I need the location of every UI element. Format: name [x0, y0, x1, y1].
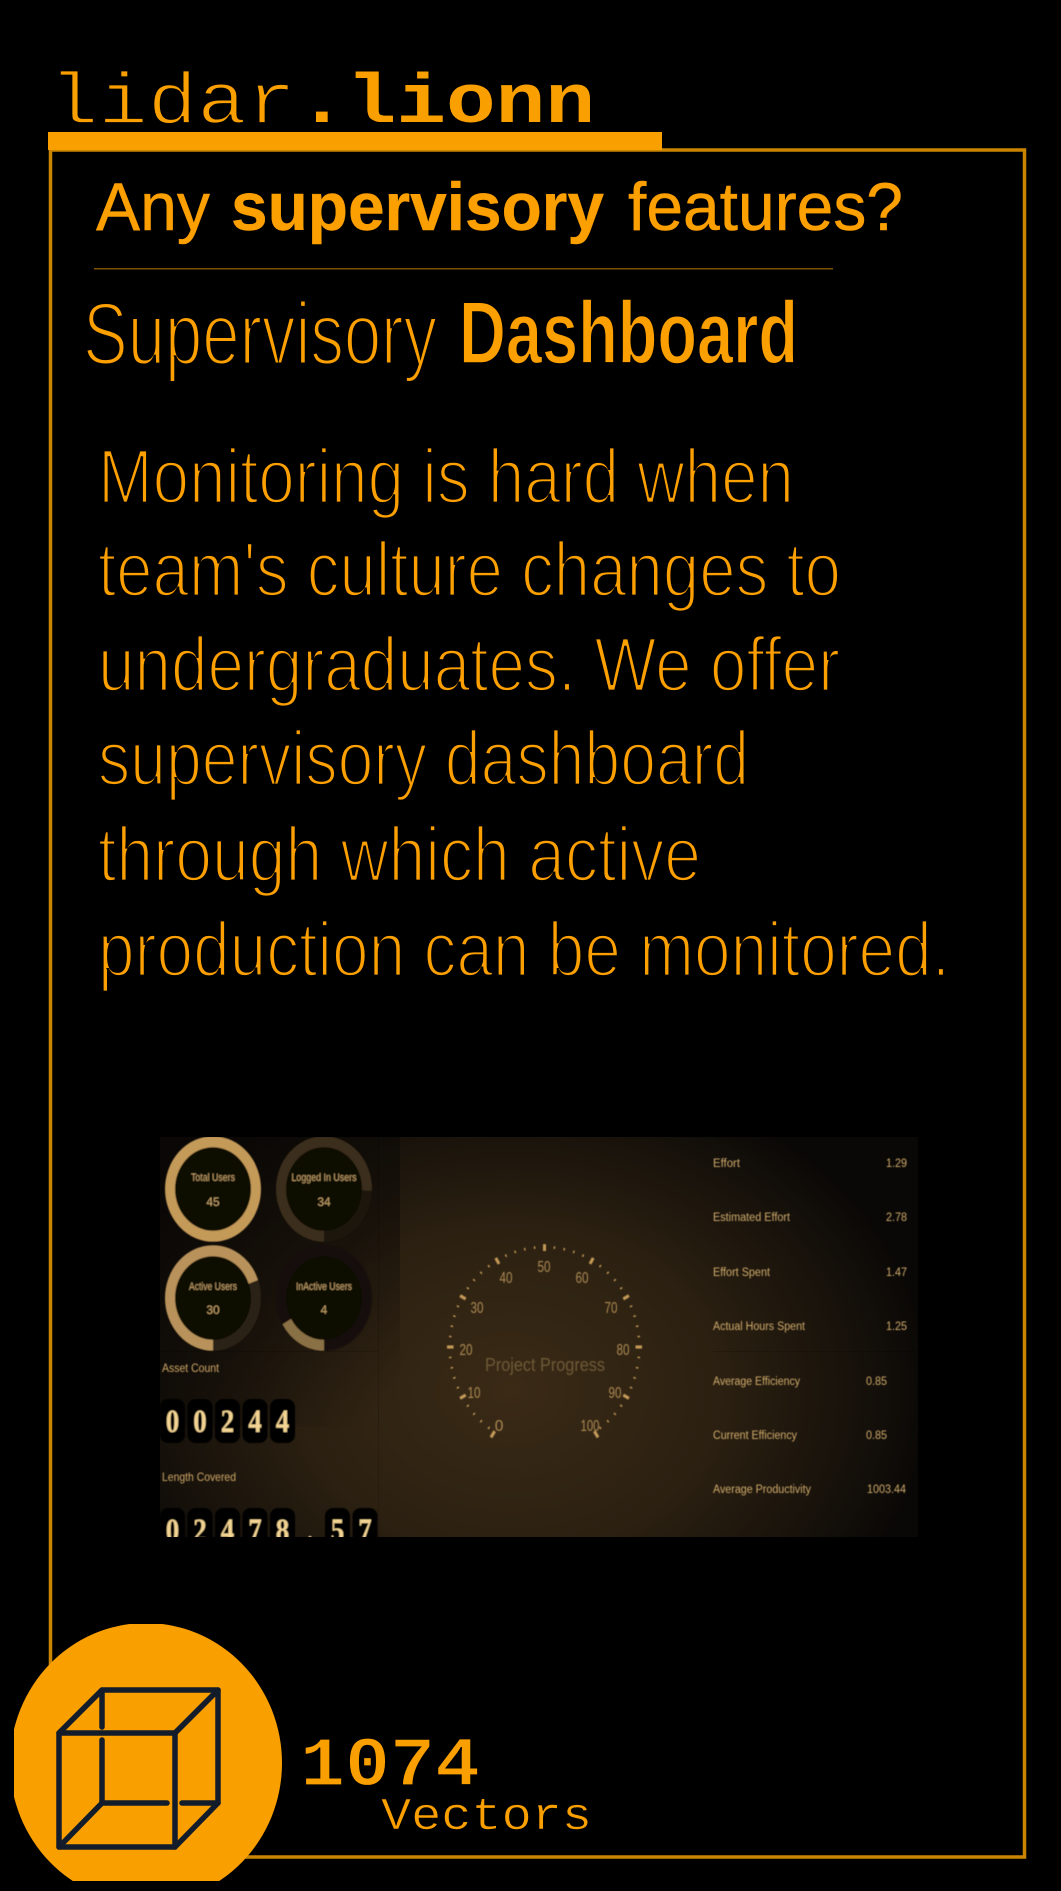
metrics list: 1.25: [886, 1321, 907, 1333]
gauge scale numbers: 0: [495, 1418, 504, 1435]
section heading: Dashboard: [459, 283, 798, 382]
asset count counter: Asset Count: [162, 1361, 220, 1375]
metrics list: 1.47: [886, 1267, 907, 1279]
asset count counter: 4: [248, 1404, 262, 1440]
metrics list: Estimated Effort: [713, 1212, 791, 1224]
asset count counter: [160, 1361, 295, 1443]
metrics list: Current Efficiency: [713, 1430, 797, 1442]
main question heading: [96, 169, 903, 245]
length covered counter: 0: [166, 1513, 179, 1549]
length covered counter: 4: [221, 1513, 234, 1549]
metrics list: 0.85: [866, 1376, 887, 1388]
metrics list: 1.29: [886, 1158, 907, 1170]
length covered counter: Length Covered: [162, 1470, 236, 1484]
metrics list: 1003.44: [867, 1484, 907, 1496]
gauge scale numbers: 80: [616, 1342, 630, 1359]
gauge scale numbers: 20: [460, 1342, 473, 1359]
gauge scale numbers: 50: [538, 1259, 551, 1276]
asset count counter: 0: [166, 1404, 179, 1440]
body text: through which active: [98, 812, 701, 898]
main question heading: features?: [628, 169, 903, 245]
ring labels: 45: [206, 1195, 220, 1209]
ring: total users: [170, 1142, 256, 1236]
asset count counter: 4: [276, 1404, 289, 1440]
main question heading: supervisory: [231, 169, 604, 245]
metrics list: Actual Hours Spent: [713, 1321, 806, 1333]
vectors label: Vectors: [381, 1792, 592, 1843]
main question heading: Any: [96, 169, 210, 245]
metrics list: Effort Spent: [713, 1267, 771, 1279]
metrics list: Average Efficiency: [713, 1376, 800, 1388]
brand logo text: lidar: [49, 63, 296, 145]
gauge scale numbers: 30: [470, 1300, 484, 1317]
section heading: [83, 283, 798, 383]
length covered counter: 2: [193, 1513, 207, 1549]
length covered counter: [160, 1472, 378, 1537]
metrics list: [713, 1158, 907, 1496]
ring labels: InActive Users: [296, 1281, 352, 1293]
metrics list: 0.85: [866, 1430, 887, 1442]
ring labels: [189, 1172, 357, 1317]
heading divider: [94, 268, 833, 270]
gauge scale numbers: 100: [580, 1418, 600, 1435]
length covered counter: 7: [358, 1513, 372, 1549]
asset count counter: 2: [221, 1404, 234, 1440]
ring labels: Logged In Users: [292, 1172, 357, 1184]
ring: logged in users: [281, 1142, 367, 1236]
length covered counter: 5: [331, 1513, 344, 1549]
gauge scale numbers: 70: [604, 1300, 618, 1317]
ring labels: Total Users: [191, 1172, 235, 1184]
ring: active users: [170, 1251, 256, 1345]
length covered counter: .: [307, 1513, 313, 1549]
asset count counter: 0: [193, 1404, 207, 1440]
brand logo text: [49, 63, 595, 145]
dashboard screenshot panel: [160, 1137, 918, 1552]
gauge ticks: [447, 1244, 642, 1437]
gauge title: Project Progress: [485, 1355, 605, 1375]
gauge scale numbers: 10: [468, 1385, 481, 1402]
vector count: 1074: [300, 1728, 480, 1807]
brand bar: [48, 132, 662, 150]
metrics list: 2.78: [886, 1212, 907, 1224]
body text: undergraduates. We offer: [98, 622, 840, 708]
ring labels: 34: [317, 1195, 331, 1209]
gauge scale numbers: 60: [576, 1270, 589, 1287]
length covered counter: 8: [276, 1513, 289, 1549]
body text: supervisory dashboard: [98, 716, 749, 802]
gauge scale numbers: [460, 1259, 630, 1435]
ring labels: 4: [321, 1303, 328, 1317]
ring labels: 30: [206, 1303, 220, 1317]
body text: [98, 434, 950, 993]
section heading: Supervisory: [83, 284, 437, 383]
ring labels: Active Users: [189, 1281, 237, 1293]
icon: wireframe cube: [59, 1690, 218, 1847]
badge disc: [10, 1623, 282, 1891]
metrics list: Average Productivity: [713, 1484, 811, 1496]
body text: team's culture changes to: [98, 527, 841, 613]
brand logo text: .lionn: [297, 65, 595, 144]
ring: inactive users: [281, 1251, 367, 1345]
gauge scale numbers: 90: [608, 1385, 622, 1402]
length covered counter: 7: [248, 1513, 262, 1549]
gauge scale numbers: 40: [500, 1270, 513, 1287]
body text: Monitoring is hard when: [98, 434, 794, 520]
metrics list: Effort: [713, 1158, 741, 1170]
